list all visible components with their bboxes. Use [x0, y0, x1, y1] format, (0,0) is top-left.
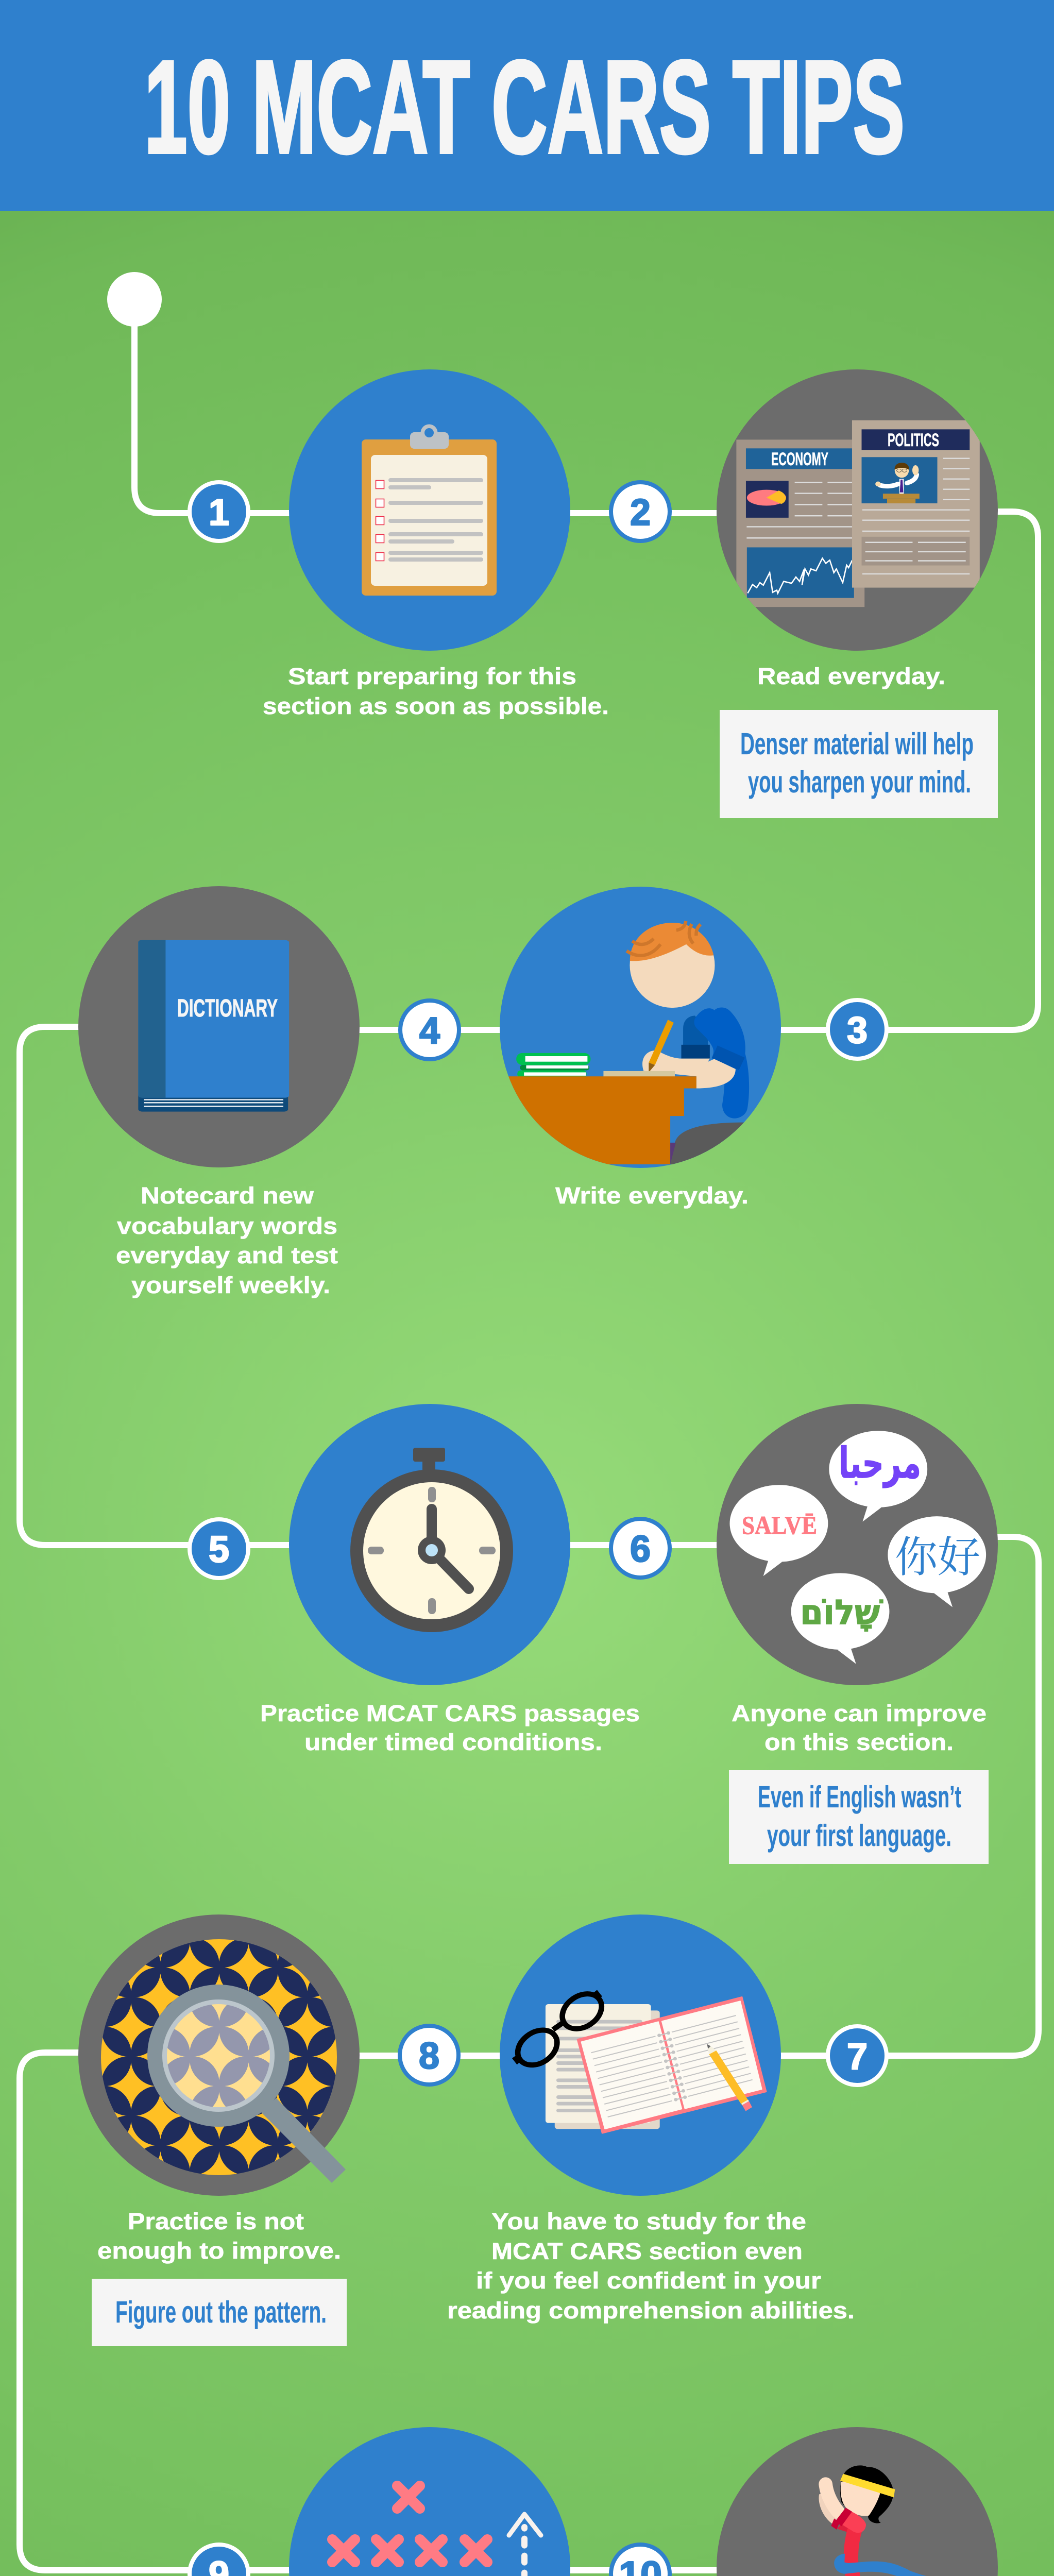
caption tip 5: Practice MCAT CARS passages: [260, 1700, 640, 1726]
caption tip 8: Practice is not: [128, 2208, 304, 2234]
panel: tip 1 clipboard: [263, 369, 609, 719]
icon: speech bubble hebrew: שָׁלוֹם: [800, 1592, 883, 1632]
caption tip 5: under timed conditions.: [304, 1729, 602, 1755]
caption tip 4: everyday and test: [116, 1242, 338, 1268]
caption tip 2: Read everyday.: [757, 663, 945, 689]
badge 9: [190, 2545, 248, 2576]
caption tip 7: MCAT CARS section even: [491, 2238, 803, 2264]
caption tip 8: [97, 2208, 341, 2264]
panel: tip 4 dictionary: [78, 886, 360, 1298]
caption tip 1: Start preparing for this: [288, 663, 576, 689]
icon: student writing: [508, 921, 749, 1164]
caption tip 6: [732, 1700, 987, 1755]
panel: tip 5 stopwatch: [260, 1404, 640, 1755]
badge 4: 4: [419, 1010, 440, 1052]
badge 3: 3: [847, 1010, 868, 1051]
icon: speech bubble arabic: مرحبا: [839, 1439, 921, 1488]
icon: play diagram: [332, 2486, 541, 2576]
caption tip 6: on this section.: [764, 1729, 954, 1755]
icon: speech bubble latin: SALVĒ: [742, 1511, 817, 1539]
icon: runner crossing finish ribbon: [819, 2465, 951, 2576]
badge 5: 5: [209, 1529, 229, 1570]
badge 1: [190, 482, 248, 541]
badge 6: [611, 1519, 670, 1578]
badge 10: [611, 2545, 670, 2576]
icon: speech bubble latin: [730, 1485, 828, 1576]
icon: dictionary book: [138, 940, 289, 1112]
callout tip 8: [92, 2279, 347, 2346]
icon: newspapers: [736, 420, 980, 607]
icon: stopwatch: [350, 1448, 513, 1632]
callout tip 8: Figure out the pattern.: [115, 2295, 327, 2329]
caption tip 1: section as soon as possible.: [263, 693, 609, 719]
badge 2: 2: [630, 492, 651, 533]
caption tip 7: You have to study for the: [491, 2208, 806, 2234]
callout tip 6: your first language.: [767, 1819, 951, 1853]
badge 5: [190, 1519, 248, 1578]
caption tip 7: [447, 2208, 855, 2324]
badge 8: [400, 2026, 458, 2084]
caption tip 7: reading comprehension abilities.: [447, 2297, 855, 2324]
icon: speech bubble chinese: [888, 1516, 986, 1607]
icon: clipboard: [362, 425, 497, 596]
badge 6: 6: [630, 1529, 651, 1570]
icon: magnifying glass: [147, 1985, 346, 2183]
caption tip 3: Write everyday.: [555, 1182, 749, 1209]
callout tip 6: [729, 1770, 989, 1864]
caption tip 6: Anyone can improve: [732, 1700, 987, 1726]
panel: tip 10 runner: [717, 2427, 998, 2576]
caption tip 5: [260, 1700, 640, 1755]
pattern disc: [98, 1937, 340, 2179]
text: economy: ECONOMY: [771, 449, 828, 469]
caption tip 7: if you feel confident in your: [476, 2267, 821, 2294]
badge 8: 8: [419, 2036, 439, 2077]
badge 2: [611, 482, 670, 541]
icon: speech bubble arabic: [829, 1431, 927, 1521]
caption tip 8: enough to improve.: [97, 2238, 341, 2264]
caption tip 1: [263, 663, 609, 719]
caption tip 4: Notecard new: [141, 1182, 314, 1209]
panel: tip 9 strategy: [289, 2427, 602, 2576]
panel: tip 6 languages: [717, 1404, 998, 1864]
header band: [0, 0, 1054, 211]
panel: tip 8 pattern: [78, 1914, 360, 2346]
icon: speech bubble hebrew: [791, 1573, 889, 1664]
caption tip 4: vocabulary words: [117, 1213, 337, 1239]
badge 1: 1: [209, 492, 229, 533]
panel: tip 2 newspapers: [717, 369, 998, 818]
icon: notes, glasses, notebook and pencil: [511, 1987, 766, 2133]
caption tip 4: yourself weekly.: [131, 1272, 330, 1298]
callout tip 2: [720, 710, 998, 818]
text: politics: POLITICS: [888, 430, 939, 450]
panel: tip 7 notebook: [447, 1914, 855, 2324]
icon: dictionary book: DICTIONARY: [177, 995, 278, 1022]
panel: tip 3 writer: [495, 887, 781, 1209]
badge 4: [400, 1001, 459, 1059]
badge 7: 7: [847, 2036, 868, 2077]
icon: speech bubble chinese: 你好: [895, 1522, 980, 1584]
badge 3: [828, 1000, 887, 1059]
badge 7: [828, 2026, 887, 2085]
caption tip 4: [116, 1182, 338, 1298]
